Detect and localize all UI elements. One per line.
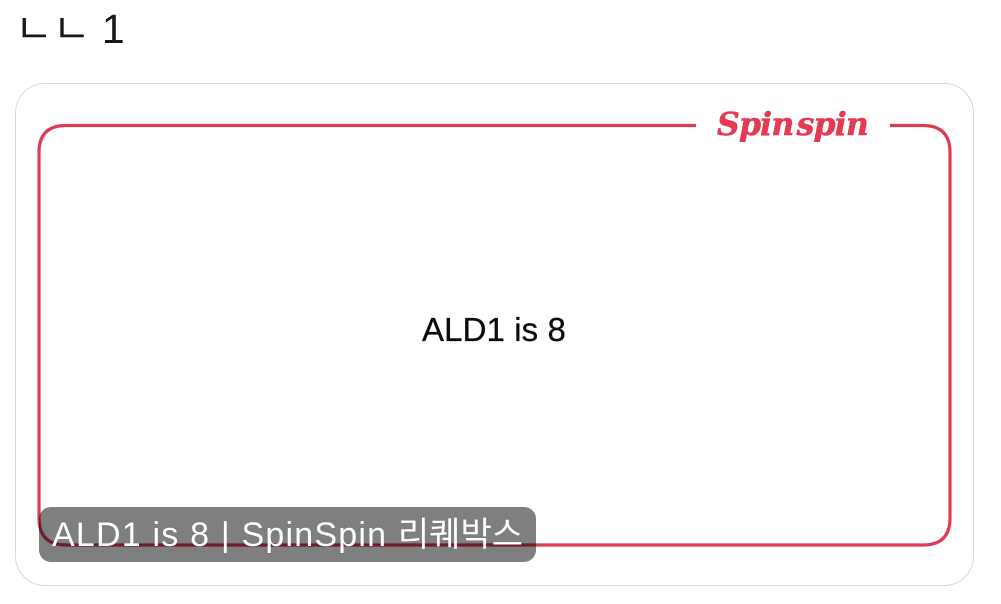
- logo: Spinspin: Spin spin: [717, 106, 868, 143]
- title: ㄴㄴ 1: [15, 6, 125, 52]
- caption overlay: [39, 507, 536, 562]
- caption text: ALD1 is 8 | SpinSpin 리퀘박스: [52, 516, 523, 554]
- panel: card: [15, 83, 974, 586]
- center text: ALD1 is 8: [422, 311, 566, 348]
